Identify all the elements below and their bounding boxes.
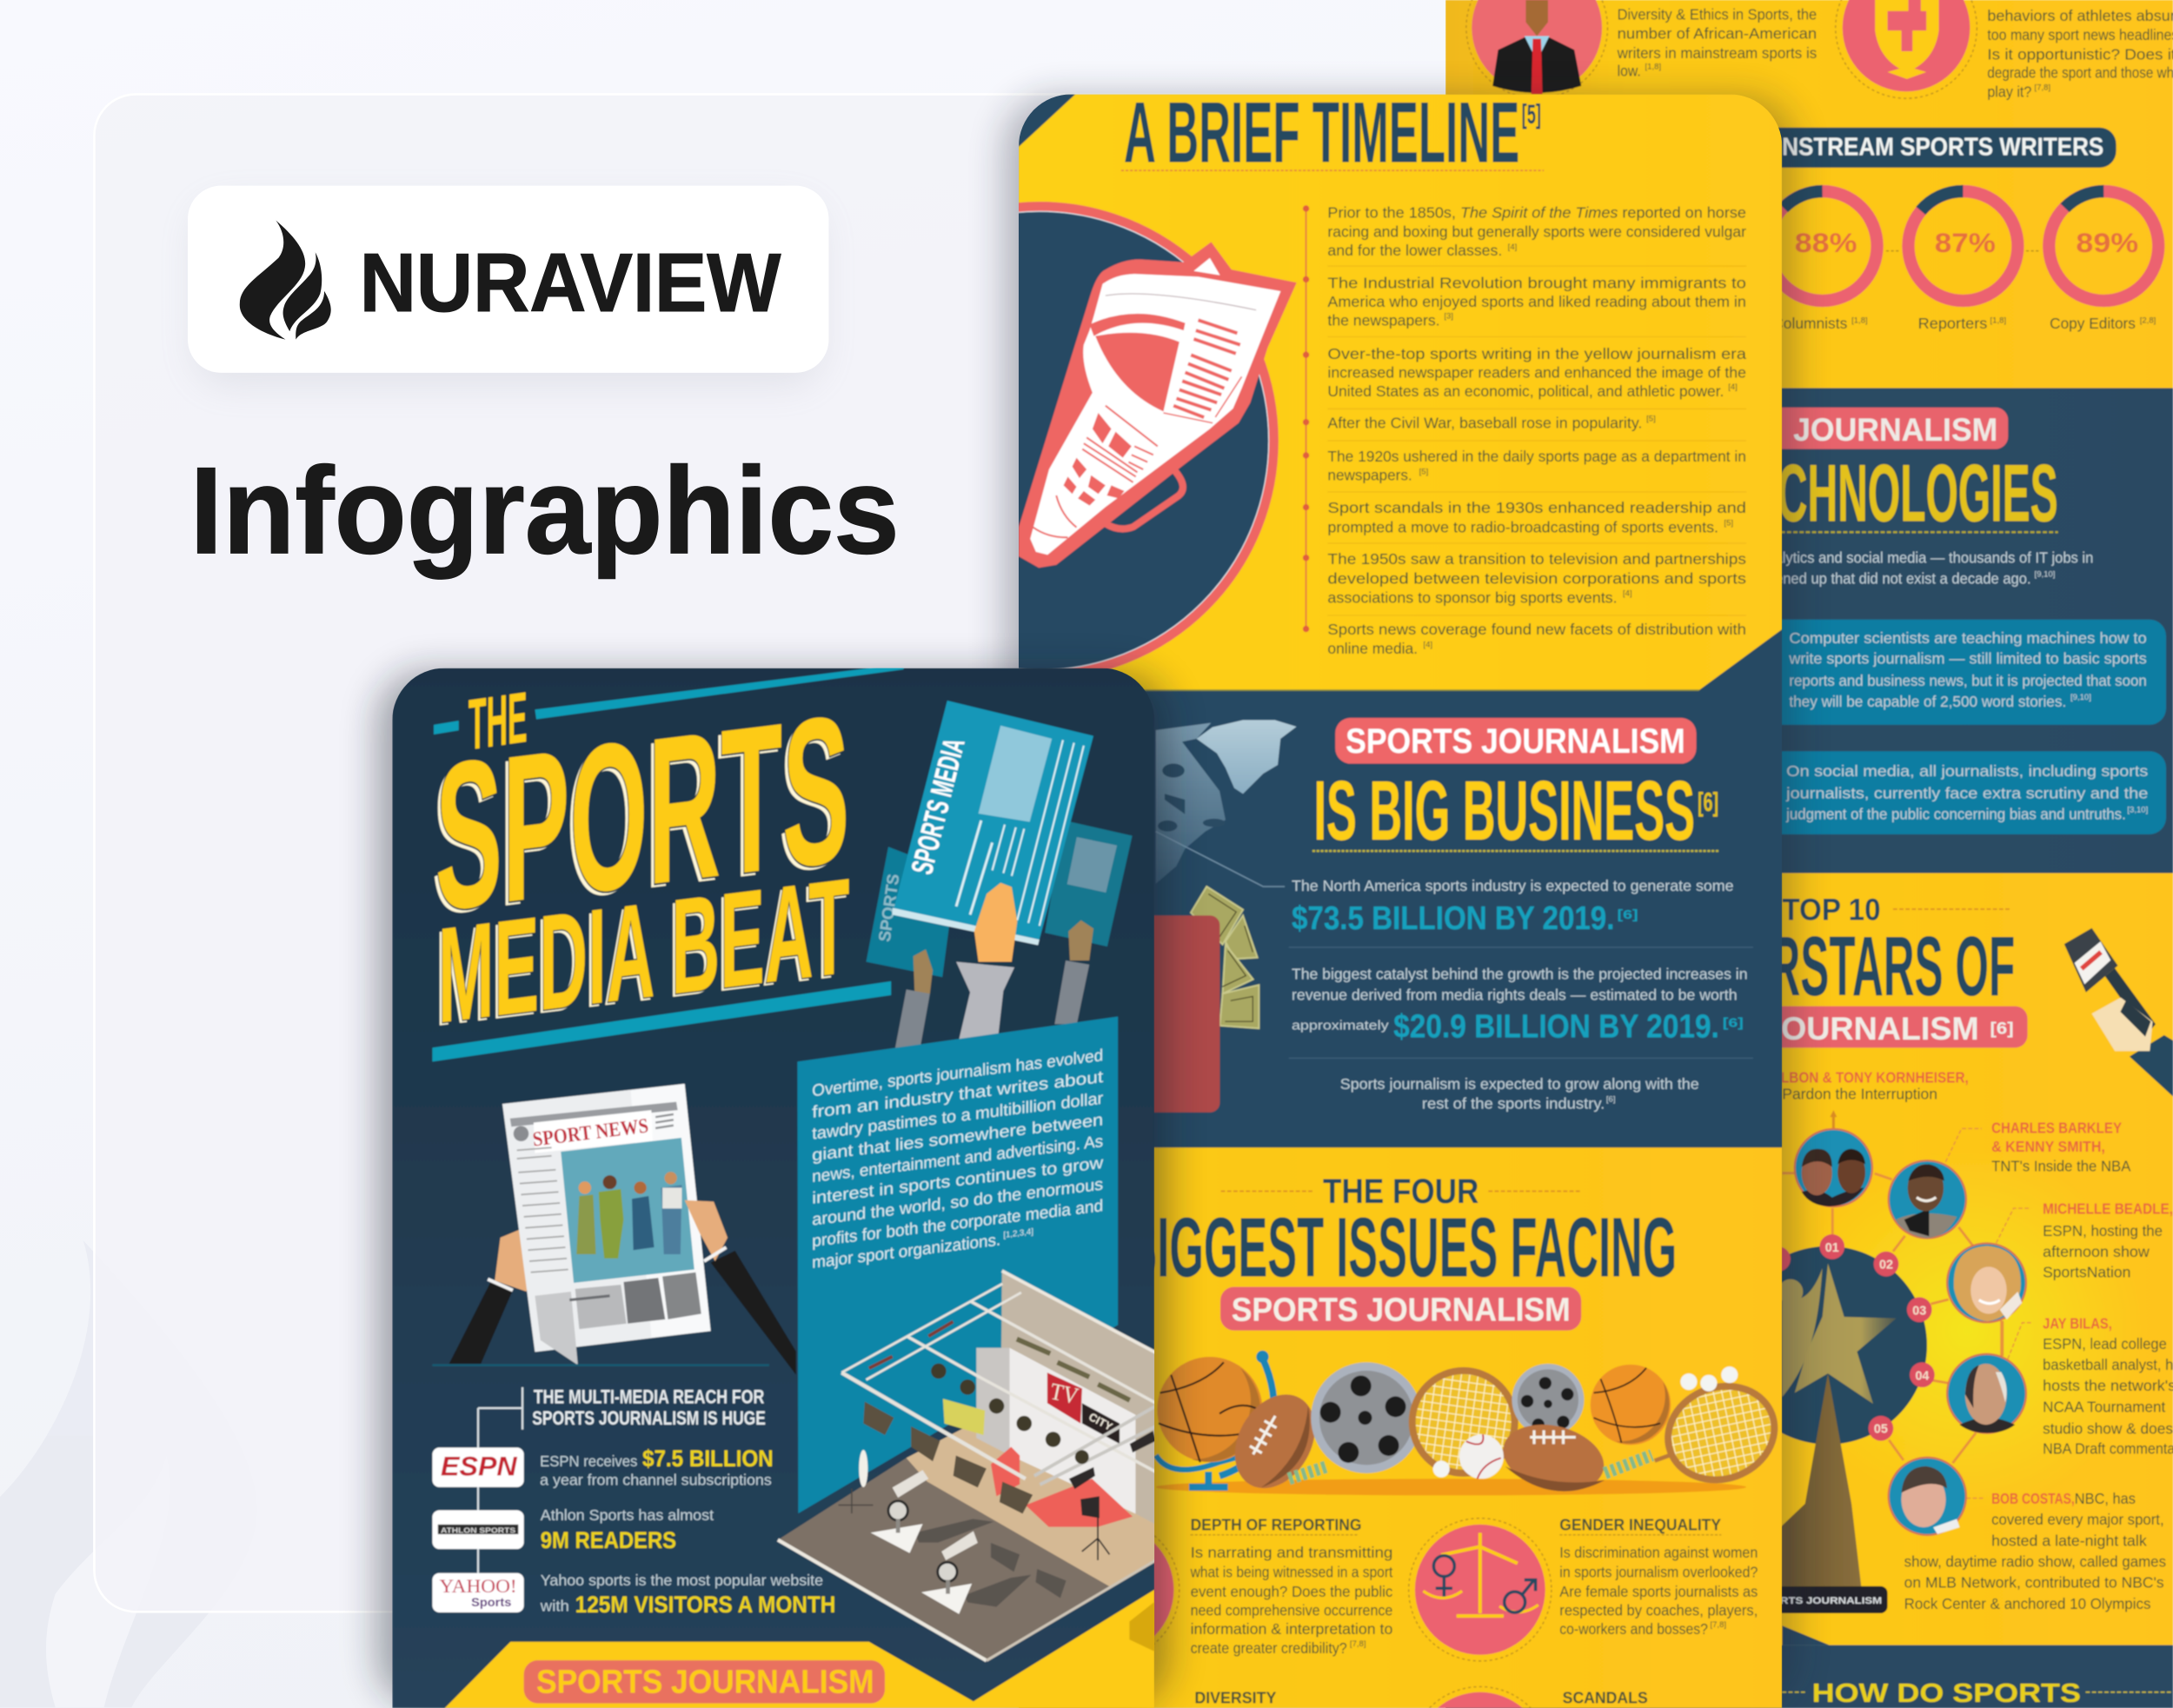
stat: espn: a year from channel subscriptions: [540, 1471, 772, 1488]
number badges: 04: [1915, 1369, 1929, 1383]
donut chart: columnists: [1768, 191, 1877, 332]
logo: yahoo sports: Sports: [471, 1596, 511, 1609]
callout: computer scientists: [1718, 620, 2166, 725]
stat: athlon: 9M READERS: [541, 1526, 676, 1553]
timeline item 8: [4]: [1423, 641, 1432, 650]
names: michelle beadle: afternoon show: [2043, 1243, 2150, 1260]
logo: espn: [432, 1447, 524, 1487]
names: jay bilas: NCAA Tournament: [2043, 1399, 2165, 1416]
icon: scandals shield: [1836, 0, 1977, 98]
names: jay bilas: studio show & does: [2043, 1419, 2173, 1437]
diversity text: number of African-American: [1618, 25, 1817, 43]
heading: top 10 superstars: JOURNALISM: [1763, 1011, 1979, 1047]
issue: depth of reporting: what is being witnessed in a sport: [1190, 1563, 1392, 1580]
callout: social media: judgment of the public concerning bias and untruths.: [1785, 805, 2126, 822]
timeline item 2: the newspapers.: [1327, 312, 1440, 329]
multi-media heading: THE MULTI-MEDIA REACH FOR: [534, 1386, 764, 1407]
panel: title column: MEDIA BEAT: [438, 850, 849, 1053]
heading: the four biggest issues: [1126, 1173, 1677, 1331]
portrait: wilbon and kornheiser: [1795, 1129, 1872, 1206]
number badges: 01: [1825, 1241, 1839, 1255]
donut chart: copy editors: 89%: [2076, 227, 2138, 258]
divider: [432, 1365, 769, 1366]
issue: gender inequality: GENDER INEQUALITY: [1559, 1515, 1721, 1533]
illustration: hands holding newspaper: SPORT NEWS: [531, 1114, 650, 1152]
tv city logo: CITY: [1086, 1410, 1115, 1433]
shadow: timeline panel: [1005, 97, 1795, 1708]
dark studio panels and tripod: [1069, 1431, 1156, 1560]
title: a brief timeline: [1121, 85, 1544, 181]
intro text: profits for both the corporate media and: [812, 1197, 1103, 1251]
icon: corner triangle: [1019, 94, 1075, 147]
scandals text: [7,8]: [2035, 83, 2050, 93]
logo: athlon sports: [432, 1510, 524, 1549]
shadow: title panel: [377, 671, 1170, 1708]
portrait: jay bilas: [1947, 1354, 2026, 1433]
stat: athlon: [541, 1506, 714, 1553]
issue: gender inequality: [1559, 1515, 1758, 1638]
illustration: hands holding sports media papers: SPORTS: [876, 873, 904, 943]
closing business text: Sports journalism is expected to grow along with the: [1340, 1075, 1699, 1093]
logo: yahoo sports: [432, 1573, 524, 1612]
issue: gender inequality: Are female sports journalists as: [1559, 1583, 1758, 1600]
icon: world map: [1156, 720, 1297, 884]
closing business text: [1340, 1075, 1699, 1113]
stat: media rights revenue: approximately: [1292, 1020, 1390, 1033]
stat: north america revenue: [6]: [1618, 908, 1638, 922]
camera 2: [921, 1532, 978, 1614]
wall strip lights: [1017, 1339, 1130, 1400]
multi-media heading: [532, 1386, 766, 1429]
scandals text: behaviors of athletes absurd: [1987, 7, 2173, 24]
names: bob costas: BOB COSTAS,: [1991, 1490, 2075, 1507]
arrow: up: [1830, 1110, 1837, 1129]
names: bob costas: on MLB Network, contributed to NBC's: [1904, 1573, 2164, 1591]
donut chart: copy editors: [2026, 191, 2158, 332]
number badges: 02: [1879, 1259, 1893, 1273]
studio monitor: [943, 1399, 985, 1435]
lighting truss: [841, 1284, 1156, 1485]
timeline item 8: online media.: [1327, 640, 1418, 657]
timeline item 6: Sport scandals in the 1930s enhanced readership and: [1327, 499, 1746, 516]
main heading: Infographics: [189, 442, 900, 580]
section edge: [1019, 689, 1699, 691]
diversity text: low.: [1618, 63, 1641, 80]
stat: yahoo: with: [540, 1598, 569, 1615]
names: michelle beadle: ESPN, hosting the: [2043, 1222, 2163, 1239]
timeline item 4: [5]: [1646, 415, 1656, 424]
section: timeline background: [1019, 94, 1782, 690]
diversity text: [1617, 5, 1817, 80]
technology intro text: [9,10]: [2035, 569, 2055, 579]
diversity text: Diversity & Ethics in Sports, the: [1618, 5, 1817, 23]
timeline item 7: developed between television corporations and sports: [1327, 569, 1746, 587]
technology intro text: that opened up that did not exist a decade ago.: [1731, 569, 2031, 587]
icon: gender inequality scales: [1409, 1519, 1552, 1661]
scandals text: Is it opportunistic? Does it: [1987, 46, 2173, 63]
stat: espn: [540, 1445, 774, 1488]
heading: sports journalism technologies: JOURNALISM: [1793, 412, 1997, 448]
issue circle: diversity icon: [1430, 1686, 1531, 1708]
heading pill: mainstream sports writers: [1691, 128, 2117, 168]
names: wilbon and kornheiser: MICHAEL WILBON & TONY KORNHEISER,: [1700, 1068, 1969, 1086]
timeline item 3: [4]: [1728, 382, 1738, 392]
donut chart: reporters: Reporters: [1918, 315, 1988, 332]
number badges: 05: [1874, 1423, 1888, 1437]
intro text: tawdry pastimes to a multibillion dollar: [812, 1090, 1104, 1144]
title: a brief timeline: A BRIEF TIMELINE: [1124, 85, 1519, 181]
donut chart: reporters: 87%: [1935, 227, 1996, 258]
diversity text: writers in mainstream sports is: [1617, 44, 1817, 62]
heading: top 10 superstars: TOP 10: [1782, 894, 1881, 927]
umbrella light: [839, 1450, 873, 1513]
heading: sports journalism is big business: IS BIG BUSINESS: [1313, 763, 1695, 858]
camera 1: [871, 1470, 928, 1553]
logo: espn: ESPN: [441, 1450, 518, 1481]
illustration: hands holding sports media papers: [866, 701, 1133, 1047]
issue: gender inequality: Is discrimination against women: [1559, 1544, 1758, 1561]
stat: yahoo: Yahoo sports is the most popular website: [541, 1572, 823, 1589]
issue: gender inequality: [7,8]: [1710, 1620, 1726, 1630]
studio walls: [976, 1271, 1156, 1527]
names: bob costas: show, daytime radio show, called games: [1904, 1553, 2166, 1571]
timeline item 3: United States as an economic, political, and athletic power.: [1327, 382, 1724, 400]
timeline item 5: [1327, 448, 1746, 483]
intro text: [812, 1047, 1104, 1273]
illustration: tv studio: [778, 1271, 1156, 1660]
illustration: hands holding newspaper: [449, 1084, 796, 1375]
tv city logo: [1047, 1372, 1120, 1444]
names: bob costas: hosted a late-night talk: [1991, 1532, 2147, 1550]
section: four issues background: [1019, 1147, 1782, 1708]
names: jay bilas: [2043, 1314, 2173, 1458]
heading: the four biggest issues: THE FOUR: [1323, 1173, 1479, 1211]
logo box: [188, 186, 828, 385]
issue: depth of reporting: event enough? Does the public: [1191, 1583, 1393, 1600]
panel: title column: MEDIA BEAT: [435, 854, 847, 1055]
stat: north america revenue: $73.5 BILLION BY 2019.: [1292, 900, 1614, 937]
names: wilbon and kornheiser: [1700, 1068, 1969, 1102]
timeline item 5: The 1920s ushered in the daily sports page as a department in: [1327, 448, 1746, 465]
names: barkley and smith: CHARLES BARKLEY: [1991, 1119, 2122, 1136]
logo wordmark: NURAVIEW: [360, 236, 781, 329]
callout: computer scientists: they will be capable of 2,500 word stories.: [1789, 693, 2066, 710]
number badges: 03: [1912, 1304, 1926, 1318]
diversity text: [1,8]: [1645, 63, 1661, 72]
callout: computer scientists: Computer scientists are teaching machines how to: [1789, 629, 2147, 647]
issue: depth of reporting: create greater credibility?: [1191, 1639, 1347, 1657]
issue: depth of reporting: [1190, 1515, 1393, 1657]
issue: gender inequality: co-workers and bosses?: [1559, 1620, 1708, 1638]
portrait: barkley and smith: [1889, 1160, 1966, 1238]
issue: scandals: SCANDALS: [1563, 1689, 1648, 1707]
names: barkley and smith: TNT's Inside the NBA: [1991, 1157, 2131, 1174]
donut chart: columnists: Columnists: [1772, 315, 1848, 332]
stat: athlon: Athlon Sports has almost: [541, 1506, 714, 1524]
timeline item 6: [1327, 499, 1746, 535]
logo: athlon sports: ATHLON SPORTS: [441, 1526, 515, 1534]
callout: social media: On social media, all journalists, including sports: [1786, 762, 2149, 780]
timeline item 7: The 1950s saw a transition to television and partnerships: [1327, 550, 1746, 568]
soft box panels: [863, 1402, 1033, 1513]
issue: gender inequality: respected by coaches, players,: [1559, 1601, 1758, 1618]
timeline item 3: Over-the-top sports writing in the yellow journalism era: [1327, 345, 1746, 362]
issue: depth of reporting: need comprehensive occurrence: [1191, 1601, 1392, 1618]
stat: media rights revenue: $20.9 BILLION BY 2019.: [1393, 1007, 1719, 1045]
closing business text: [6]: [1606, 1095, 1616, 1105]
icon: money bills: [1191, 887, 1259, 1028]
tv city logo: TV: [1048, 1378, 1080, 1409]
icon: off-panel issue circle: [1038, 1519, 1180, 1660]
icon: wallet: [1109, 915, 1219, 1113]
issue: depth of reporting: Is narrating and transmitting: [1191, 1544, 1392, 1561]
intro text: news, entertainment and advertising. As: [812, 1133, 1103, 1186]
timeline item 8: Sports news coverage found new facets of distribution with: [1327, 621, 1746, 638]
heading: how do sports: HOW DO SPORTS: [1812, 1679, 2081, 1708]
timeline item 1: and for the lower classes.: [1327, 242, 1502, 259]
closing business text: rest of the sports industry.: [1422, 1095, 1605, 1113]
issue: diversity: DIVERSITY: [1194, 1689, 1276, 1707]
names: jay bilas: hosts the network's: [2043, 1377, 2173, 1394]
stat: yahoo: [540, 1572, 835, 1618]
technology intro text: Sports analytics and social media — thousands of IT jobs in: [1713, 548, 2093, 566]
timeline item 1: [1327, 203, 1746, 259]
timeline item 1: Prior to the 1850s, The Spirit of the Times reported on horse: [1327, 203, 1746, 221]
content card: [94, 94, 1480, 1612]
timeline item 3: [1327, 345, 1746, 400]
names: bob costas: Rock Center & anchored 10 Olympics: [1904, 1595, 2151, 1612]
heading: sports journalism is big business: [6]: [1698, 788, 1718, 817]
timeline item 2: America who enjoyed sports and liked reading about them in: [1327, 293, 1746, 310]
intro text: [1,2,3,4]: [1003, 1227, 1033, 1240]
callout: computer scientists: write sports journalism — still limited to basic sports: [1788, 650, 2147, 668]
title accent bars: [432, 664, 904, 1061]
donut chart: copy editors: Copy Editors: [2050, 315, 2136, 332]
stat: north america revenue: The North America sports industry is expected to generate some: [1292, 877, 1734, 894]
timeline item 6: [5]: [1724, 518, 1733, 528]
pointer line: [1156, 832, 1285, 887]
timeline item 4: After the Civil War, baseball rose in popularity.: [1327, 415, 1642, 432]
stat: media rights revenue: The biggest catalyst behind the growth is the projected increases in: [1292, 965, 1748, 982]
names: bob costas: [1904, 1490, 2166, 1612]
label: sports journalism badge: TOP SPORTS JOURNALISM: [1730, 1596, 1882, 1606]
scandals text: [1987, 7, 2173, 101]
callout: computer scientists: reports and business news, but it is projected that soon: [1789, 672, 2147, 689]
studio floor: [778, 1425, 1156, 1660]
intro text: interest in sports continues to grow: [812, 1154, 1103, 1208]
timeline item 6: prompted a move to radio-broadcasting of sports events.: [1327, 518, 1718, 535]
heading pill: mainstream sports writers: MAINSTREAM SPORTS WRITERS: [1741, 134, 2103, 162]
timeline item 2: [1327, 275, 1746, 329]
callout: social media: [1718, 751, 2166, 834]
donut chart: columnists: 88%: [1795, 227, 1857, 258]
stat: media rights revenue: revenue derived from media rights deals — estimated to be worth: [1292, 986, 1738, 1003]
callout: social media: journalists, currently face extra scrutiny and the: [1785, 784, 2148, 801]
icon: microphone and hand: [2064, 928, 2173, 1097]
icon: star and monument: [1718, 1246, 1927, 1586]
heading: sports journalism is big business: SPORTS JOURNALISM: [1346, 722, 1685, 761]
timeline item 8: [1327, 621, 1746, 657]
heading: sports journalism is big business: [1312, 718, 1718, 858]
timeline item 1: racing and boxing but generally sports were considered vulgar: [1327, 223, 1746, 241]
names: jay bilas: ESPN, lead college: [2043, 1335, 2167, 1352]
names: barkley and smith: & KENNY SMITH,: [1991, 1138, 2105, 1155]
number badges: [1765, 1234, 1935, 1441]
stat: espn: $7.5 BILLION: [642, 1445, 774, 1472]
heading: top 10 superstars: [6]: [1990, 1020, 2014, 1038]
panel: title column: THE: [468, 676, 528, 766]
hanging lights: [931, 1364, 1089, 1464]
stat: media rights revenue: [6]: [1723, 1016, 1744, 1030]
intro text: major sport organizations.: [812, 1231, 1000, 1273]
timeline item 7: [1327, 550, 1746, 607]
illustration: sports balls and film reels: [1156, 1351, 1788, 1503]
intro text: from an industry that writes about: [812, 1068, 1104, 1122]
money bill details: [1208, 894, 1253, 1021]
icon: yellow box: [1129, 1601, 1156, 1652]
logo: yahoo sports: YAHOO!: [439, 1575, 517, 1597]
timeline item 3: increased newspaper readers and enhanced the image of the: [1327, 363, 1746, 381]
panel: title column: [392, 664, 1156, 1708]
panel: title column: SPORTS: [432, 675, 846, 960]
icon: flame logo: [240, 221, 331, 340]
stat: espn: ESPN receives: [540, 1452, 638, 1470]
donut chart: reporters: [1886, 191, 2017, 332]
heading: sports journalism technologies: [1663, 408, 2058, 539]
panel: right infographic column: [1445, 0, 2173, 1708]
intro text: giant that lies somewhere between: [812, 1111, 1103, 1165]
panel: intro text block: [797, 1017, 1118, 1513]
portrait: michelle beadle: [1947, 1243, 2026, 1322]
icon: diversity portrait: [1466, 0, 1607, 98]
issue: depth of reporting: DEPTH OF REPORTING: [1191, 1515, 1361, 1533]
names: bob costas: NBC, has: [2075, 1490, 2136, 1507]
timeline rail: [1303, 205, 1746, 632]
multi-media heading: SPORTS JOURNALISM IS HUGE: [532, 1407, 766, 1429]
timeline item 7: [4]: [1623, 589, 1632, 599]
names: barkley and smith: [1991, 1119, 2131, 1174]
stat: north america revenue: [1292, 877, 1734, 937]
connector tree: [478, 1387, 522, 1574]
connector network: [1782, 1128, 2031, 1499]
heading: top 10 superstars: [1652, 894, 2028, 1047]
names: michelle beadle: SportsNation: [2043, 1263, 2130, 1280]
timeline item 7: associations to sponsor big sports events.: [1327, 589, 1618, 607]
label: sports journalism badge: [1718, 1586, 1888, 1613]
illustration: hands holding sports media papers: SPORTS MEDIA: [905, 734, 972, 878]
names: jay bilas: JAY BILAS,: [2043, 1314, 2112, 1332]
names: bob costas: covered every major sport,: [1991, 1511, 2164, 1528]
donut chart: copy editors: [2,8]: [2140, 316, 2156, 326]
names: wilbon and kornheiser: Pardon the Interruption: [1782, 1085, 1937, 1102]
bottom pill: sports journalism: SPORTS JOURNALISM: [536, 1664, 874, 1701]
panel: title column: SPORTS: [435, 671, 849, 955]
stat: yahoo: 125M VISITORS A MONTH: [575, 1591, 835, 1618]
issue: gender inequality: in sports journalism overlooked?: [1559, 1563, 1758, 1580]
callout: computer scientists: [9,10]: [2070, 693, 2091, 702]
donut chart: reporters: [1,8]: [1990, 316, 2006, 326]
scandals text: play it?: [1987, 83, 2032, 101]
callout: social media: [3,10]: [2127, 805, 2148, 814]
technology intro text: [1713, 548, 2093, 587]
stat: media rights revenue: [1292, 965, 1748, 1045]
watermark flame: [0, 1240, 256, 1707]
timeline item 2: The Industrial Revolution brought many immigrants to: [1327, 275, 1746, 292]
intro text: around the world, so do the enormous: [812, 1175, 1103, 1229]
timeline item 5: [5]: [1419, 467, 1428, 476]
portrait: bob costas: [1889, 1458, 1966, 1535]
figures on newspaper: [576, 1172, 681, 1259]
section: bottom yellow band: [445, 1590, 1154, 1708]
heading: the four biggest issues: SPORTS JOURNALISM: [1232, 1292, 1571, 1329]
timeline item 5: newspapers.: [1327, 466, 1412, 483]
panel: timeline and business column: [805, 85, 1788, 1708]
issue: depth of reporting: [7,8]: [1350, 1639, 1366, 1649]
donut chart: columnists: [1,8]: [1851, 316, 1868, 326]
issue: depth of reporting: information & interpretation to: [1191, 1620, 1392, 1638]
heading: the four biggest issues: BIGGEST ISSUES FACING: [1126, 1200, 1677, 1294]
title: media beat: [435, 850, 849, 1055]
intro text: Overtime, sports journalism has evolved: [812, 1047, 1103, 1100]
names: michelle beadle: [2043, 1200, 2173, 1280]
timeline item 1: [4]: [1508, 243, 1517, 252]
title: a brief timeline: [5]: [1522, 98, 1541, 130]
icon: navy circle with rolled newspaper megaphone: [805, 207, 1297, 675]
timeline item 2: [3]: [1444, 312, 1453, 322]
title: sports: [432, 671, 849, 960]
